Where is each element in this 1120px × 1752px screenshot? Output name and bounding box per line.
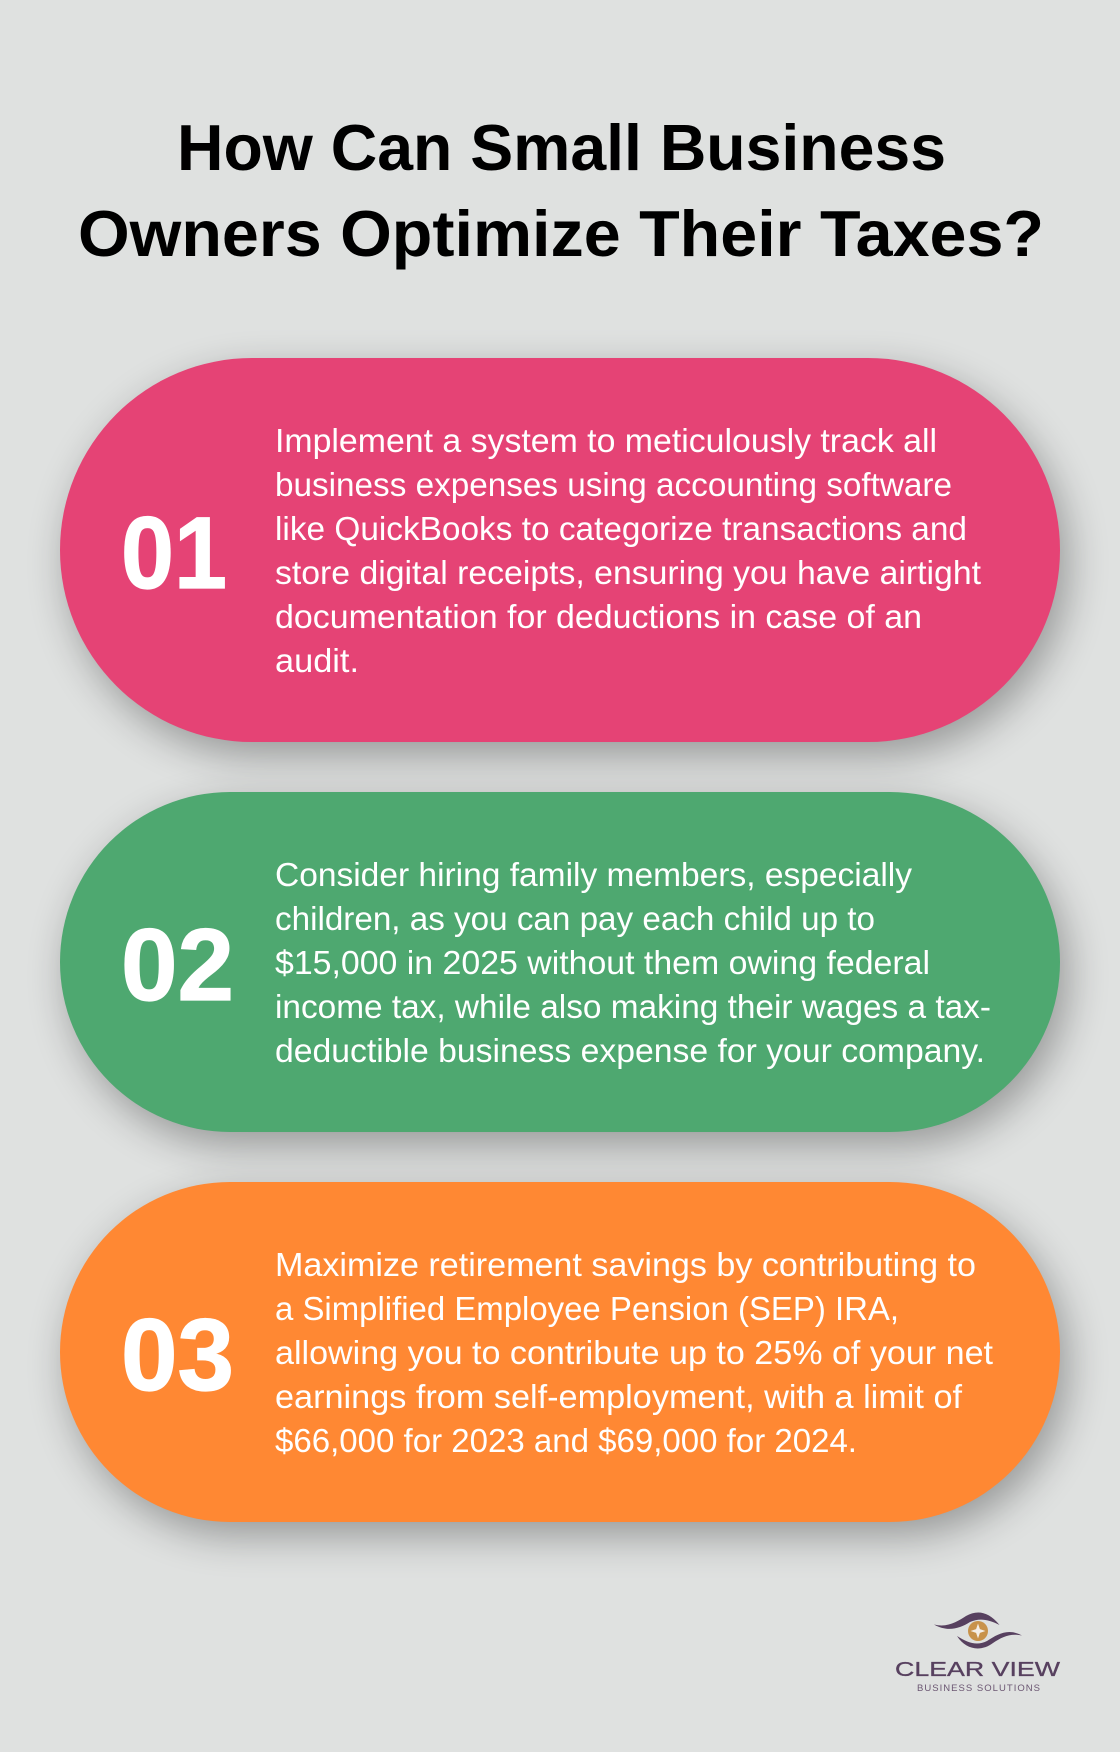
icon: eye <box>934 1613 1022 1648</box>
text: step 02 description: $15,000 in 2025 without them owing federal <box>275 944 930 981</box>
title <box>78 111 1044 270</box>
text: step 01 description <box>275 422 981 679</box>
panel: step 01 <box>60 358 1060 742</box>
number 03: 03 <box>121 1298 234 1412</box>
wordmark: CLEAR VIEW <box>895 1659 1060 1681</box>
panel: step 03 <box>60 1182 1060 1522</box>
text: step 02 description <box>275 856 991 1069</box>
text: step 01 description: documentation for deductions in case of an <box>275 598 922 635</box>
text: step 01 description: store digital receipts, ensuring you have airtight <box>275 554 981 591</box>
text: step 03 description: allowing you to contribute up to 25% of your net <box>275 1334 993 1371</box>
panel: step 02 <box>60 792 1060 1132</box>
text: step 01 description: business expenses using accounting software <box>275 466 952 503</box>
text: step 02 description: children, as you can pay each child up to <box>275 900 875 937</box>
text: step 03 description <box>275 1246 993 1459</box>
text: step 02 description: Consider hiring family members, especially <box>275 856 912 893</box>
logo: Clear View Business Solutions <box>895 1612 1060 1694</box>
text: step 01 description: like QuickBooks to categorize transactions and <box>275 510 967 547</box>
text: step 02 description: income tax, while also making their wages a tax- <box>275 988 991 1025</box>
text: step 03 description: Maximize retirement savings by contributing to <box>275 1246 976 1283</box>
number 02: 02 <box>121 908 234 1022</box>
number 01: 01 <box>121 496 227 610</box>
text: step 03 description: a Simplified Employee Pension (SEP) IRA, <box>275 1290 899 1327</box>
title: Owners Optimize Their Taxes? <box>78 197 1044 270</box>
text: step 01 description: Implement a system to meticulously track all <box>275 422 937 459</box>
text: step 03 description: earnings from self-employment, with a limit of <box>275 1378 963 1415</box>
text: step 02 description: deductible business expense for your company. <box>275 1032 985 1069</box>
title: How Can Small Business <box>177 111 946 184</box>
text: step 03 description: $66,000 for 2023 and $69,000 for 2024. <box>275 1422 857 1459</box>
tagline: BUSINESS SOLUTIONS <box>917 1683 1040 1694</box>
text: step 01 description: audit. <box>275 642 359 679</box>
